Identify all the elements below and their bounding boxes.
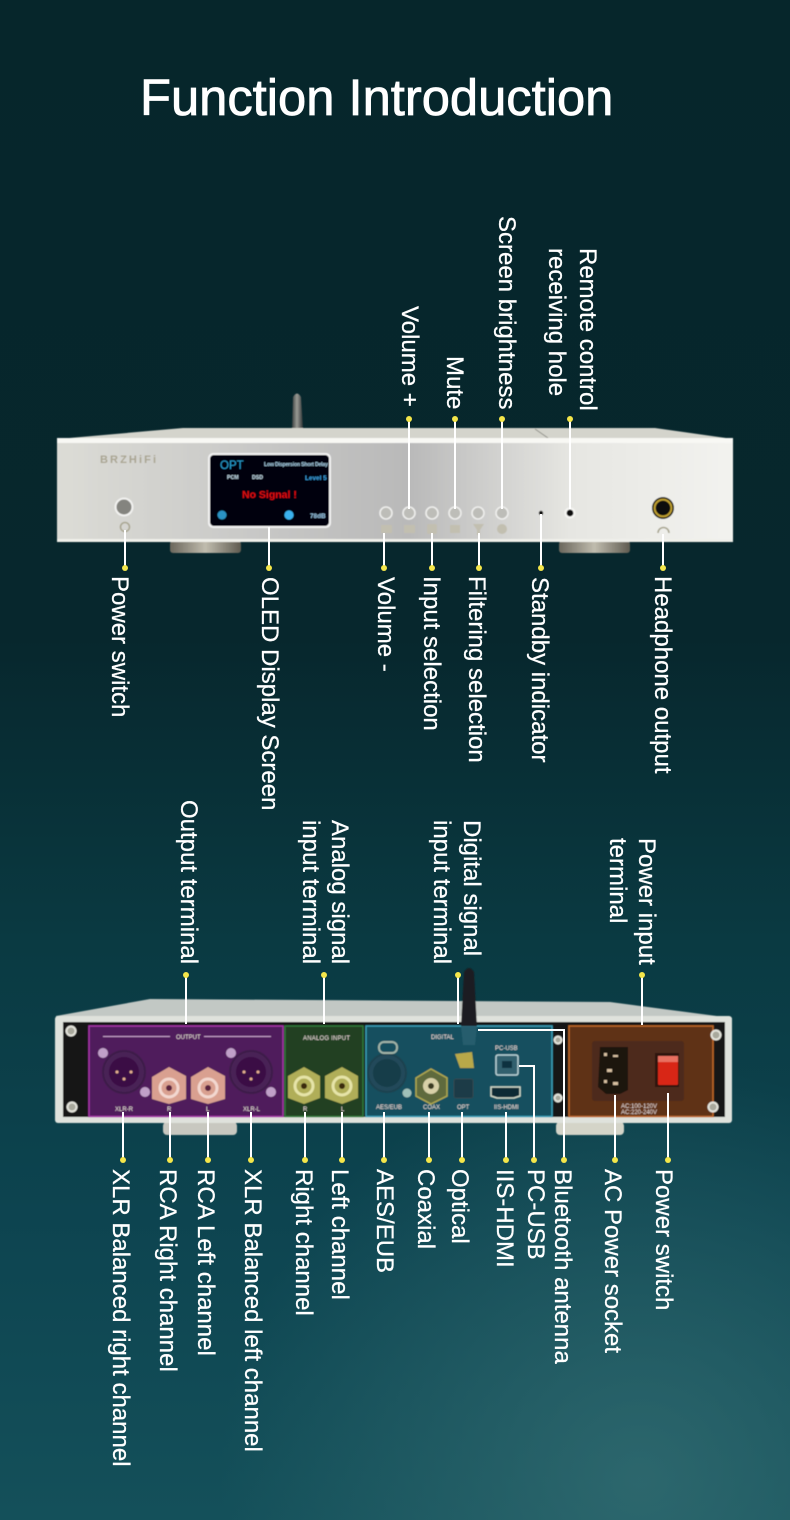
labels: top row front <box>396 216 601 411</box>
power rocker switch <box>655 1053 679 1087</box>
labels: bottom row rear: Coaxial <box>412 1169 439 1249</box>
labels: top row rear: input terminal <box>297 820 324 964</box>
rear antenna <box>461 968 477 1045</box>
rear feet <box>163 1122 624 1135</box>
labels: top row front: Screen brightness <box>493 216 520 409</box>
labels: top row rear: input terminal <box>428 820 455 964</box>
labels: bottom row rear: Left channel <box>326 1169 353 1300</box>
OLED screen <box>208 453 331 528</box>
panel: digital input: COAX <box>423 1105 440 1111</box>
panel: analog input: ANALOG INPUT <box>303 1036 350 1042</box>
panel: digital input: OPT <box>457 1105 470 1111</box>
labels: bottom row front: Power switch <box>106 576 133 717</box>
labels: bottom row rear: IIS-HDMI <box>491 1169 518 1268</box>
brand logo: BRZHiFi <box>100 454 156 466</box>
rear leader lines <box>120 972 671 1163</box>
power button <box>114 498 134 532</box>
panel: power input <box>569 1026 713 1116</box>
panel: power input: AC:220-240V <box>621 1110 657 1116</box>
labels: bottom row rear: XLR Balanced left channel <box>239 1169 266 1452</box>
labels: bottom row rear: Optical <box>446 1169 473 1244</box>
labels: top row rear: Output terminal <box>175 800 202 964</box>
panel: output: L <box>206 1107 210 1113</box>
title: Function Introduction <box>140 69 613 126</box>
corner screws <box>66 1026 720 1112</box>
standby indicator <box>539 511 543 515</box>
panel: analog input: R <box>303 1107 308 1113</box>
labels: top row front: receiving hole <box>543 248 570 396</box>
labels: bottom row rear: XLR Balanced right channel <box>107 1169 134 1467</box>
panel: output: XLR-R <box>115 1107 134 1113</box>
headphone jack <box>652 497 674 533</box>
labels: bottom row front: Volume - <box>372 577 399 672</box>
panel: digital input: DIGITAL <box>431 1035 455 1041</box>
feet <box>170 541 630 553</box>
OLED screen: OPT <box>220 460 244 472</box>
labels: bottom row front: Headphone output <box>649 576 676 774</box>
power socket <box>598 1047 628 1094</box>
rear body <box>55 1016 732 1123</box>
labels: bottom row rear: Power switch <box>650 1169 677 1310</box>
panel: output: XLR-L <box>243 1107 261 1113</box>
OLED screen: Level 5 <box>305 475 327 482</box>
panel: output: R <box>167 1107 172 1113</box>
labels: bottom row rear: AC Power socket <box>599 1169 626 1353</box>
labels: bottom row rear: Bluetooth antenna <box>549 1169 576 1364</box>
top plate <box>57 428 733 444</box>
antenna <box>292 394 303 428</box>
remote receiver <box>564 507 576 519</box>
panel: digital input: IIS-HDMI <box>494 1105 519 1111</box>
labels: top row front: Remote control <box>574 248 601 411</box>
OLED screen: DSD <box>252 475 263 481</box>
front leader lines <box>122 416 666 571</box>
OLED screen: Low Dispersion Short Delay <box>264 462 328 468</box>
panel: analog input: L <box>341 1107 345 1113</box>
panel: digital input <box>366 1026 552 1116</box>
front face <box>57 438 733 542</box>
OLED screen: PCM <box>227 475 239 481</box>
labels: top row rear: Analog signal <box>326 820 353 964</box>
labels: bottom row front: Input selection <box>418 576 445 731</box>
labels: bottom row rear: Right channel <box>290 1169 317 1316</box>
labels: bottom row rear: AES/EUB <box>371 1169 398 1273</box>
OLED screen: 78dB <box>310 513 326 520</box>
panel: digital input: AES/EUB <box>376 1105 402 1111</box>
rear panel device <box>55 968 732 1135</box>
panel: power input: AC:100-120V <box>621 1104 657 1110</box>
OLED screen: No Signal ! <box>242 489 297 501</box>
panel: digital input: PC-USB <box>495 1046 518 1052</box>
panel: output <box>89 1026 283 1116</box>
labels: bottom row front: Filtering selection <box>463 576 490 763</box>
rear top plate <box>56 999 732 1024</box>
front buttons <box>380 507 508 519</box>
labels: top row rear <box>175 800 660 965</box>
panel: output: OUTPUT <box>176 1035 201 1041</box>
labels: bottom row rear: RCA Right channel <box>154 1169 181 1372</box>
rear inset <box>63 1022 725 1117</box>
labels: bottom row front: OLED Display Screen <box>256 577 283 810</box>
labels: top row rear: Power input <box>633 838 660 965</box>
button icons <box>381 524 507 535</box>
labels: top row front: Mute <box>441 356 468 409</box>
panel: analog input <box>285 1026 363 1116</box>
labels: top row rear: terminal <box>604 838 631 923</box>
labels: bottom row rear: PC-USB <box>522 1169 549 1260</box>
labels: bottom row rear <box>107 1169 677 1467</box>
labels: bottom row rear: RCA Left channel <box>192 1169 219 1356</box>
labels: bottom row front <box>106 576 676 810</box>
labels: bottom row front: Standby indicator <box>526 577 553 762</box>
labels: top row rear: Digital signal <box>458 820 485 956</box>
front panel device <box>57 394 733 553</box>
labels: top row front: Volume + <box>396 306 423 407</box>
